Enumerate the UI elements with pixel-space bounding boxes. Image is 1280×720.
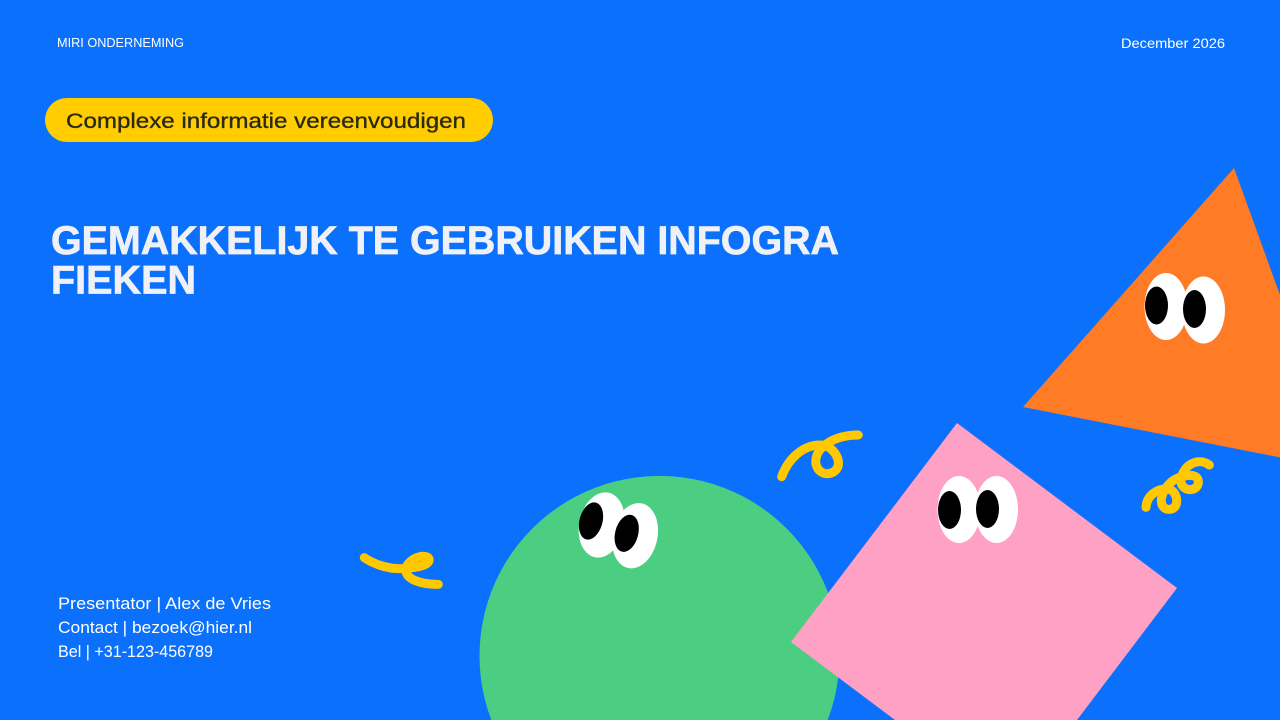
contact details: Bel | +31-123-456789 [58, 642, 213, 661]
date: December 2026 [1121, 36, 1225, 51]
pink square character [791, 423, 1177, 720]
title [51, 219, 839, 302]
tag pill: Complexe informatie vereenvoudigen [66, 109, 466, 133]
squiggle: top [782, 435, 858, 477]
title: FIEKEN [51, 258, 196, 302]
orange triangle character [1023, 168, 1280, 457]
company name: MIRI ONDERNEMING [57, 35, 184, 50]
contact details [58, 594, 271, 661]
squiggle: right [1146, 462, 1209, 509]
title: GEMAKKELIJK TE GEBRUIKEN INFOGRA [51, 219, 839, 263]
contact details: Presentator | Alex de Vries [58, 594, 271, 613]
contact details: Contact | bezoek@hier.nl [58, 618, 252, 637]
squiggle: left [364, 556, 438, 584]
green circle character [480, 476, 840, 720]
tag pill [45, 98, 493, 142]
